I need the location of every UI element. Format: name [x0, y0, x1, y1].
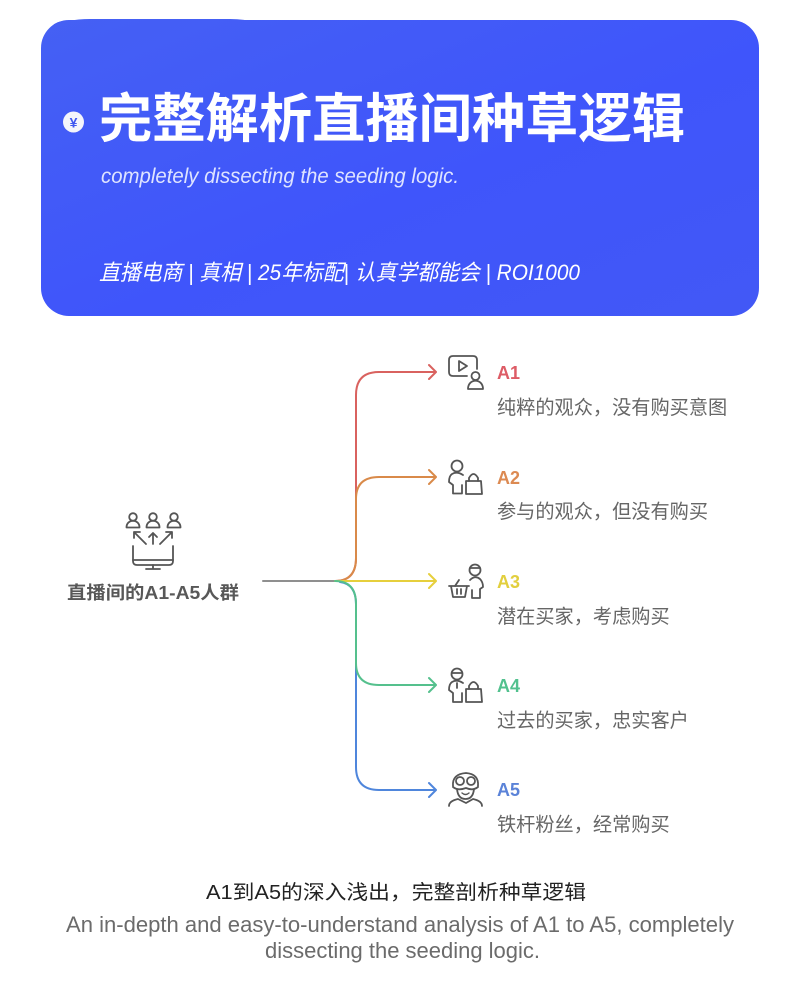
chart: branching connectors	[263, 365, 436, 797]
icon: viewer with video screen	[449, 356, 483, 389]
icon: audience and screen	[126, 513, 180, 569]
panel: audience source	[67, 513, 239, 603]
row: A5	[449, 773, 670, 836]
arrow: A3 branch	[335, 574, 436, 588]
row: A2	[449, 460, 708, 523]
label: A3: A3	[497, 572, 520, 592]
row: A4	[449, 668, 689, 732]
label: A4: A4	[497, 676, 520, 696]
title: 完整解析直播间种草逻辑	[99, 90, 685, 149]
label: A1: A1	[497, 363, 520, 383]
audience label: 直播间的A1-A5人群	[67, 582, 239, 603]
row: A1	[449, 356, 727, 419]
arrow: A5 branch	[340, 582, 436, 797]
tag line: 直播电商 | 真相 | 25年标配| 认真学都能会 | ROI1000	[99, 260, 581, 285]
subtitle: completely dissecting the seeding logic.	[101, 165, 459, 188]
description: A2: 参与的观众，但没有购买	[497, 501, 708, 523]
description: A3: 潜在买家，考虑购买	[497, 606, 670, 628]
arrow: A4 branch	[335, 581, 436, 692]
icon: returning customer with bag	[449, 668, 482, 702]
caption: english summary: An in-depth and easy-to-understand analysis of A1 to A5, completely	[66, 912, 734, 937]
description: A5: 铁杆粉丝，经常购买	[497, 814, 670, 836]
panel: header banner	[41, 19, 759, 316]
description: A4: 过去的买家，忠实客户	[497, 710, 689, 732]
arrow: A1 branch	[335, 365, 436, 581]
caption: english summary: dissecting the seeding logic.	[265, 938, 540, 963]
icon: loyal fan with helmet and goggles	[449, 773, 482, 806]
icon: yuan coin	[63, 112, 84, 132]
label: A2: A2	[497, 468, 520, 488]
icon: yuan coin: ¥	[70, 114, 78, 130]
description: A1: 纯粹的观众，没有购买意图	[497, 397, 727, 419]
caption: chinese summary: A1到A5的深入浅出，完整剖析种草逻辑	[206, 881, 586, 904]
icon: person with shopping bag	[449, 460, 482, 494]
icon: person with basket	[449, 564, 483, 598]
caption: english summary	[66, 912, 734, 963]
label: A5: A5	[497, 780, 520, 800]
arrow: A2 branch	[335, 470, 436, 581]
row: A3	[449, 564, 670, 628]
